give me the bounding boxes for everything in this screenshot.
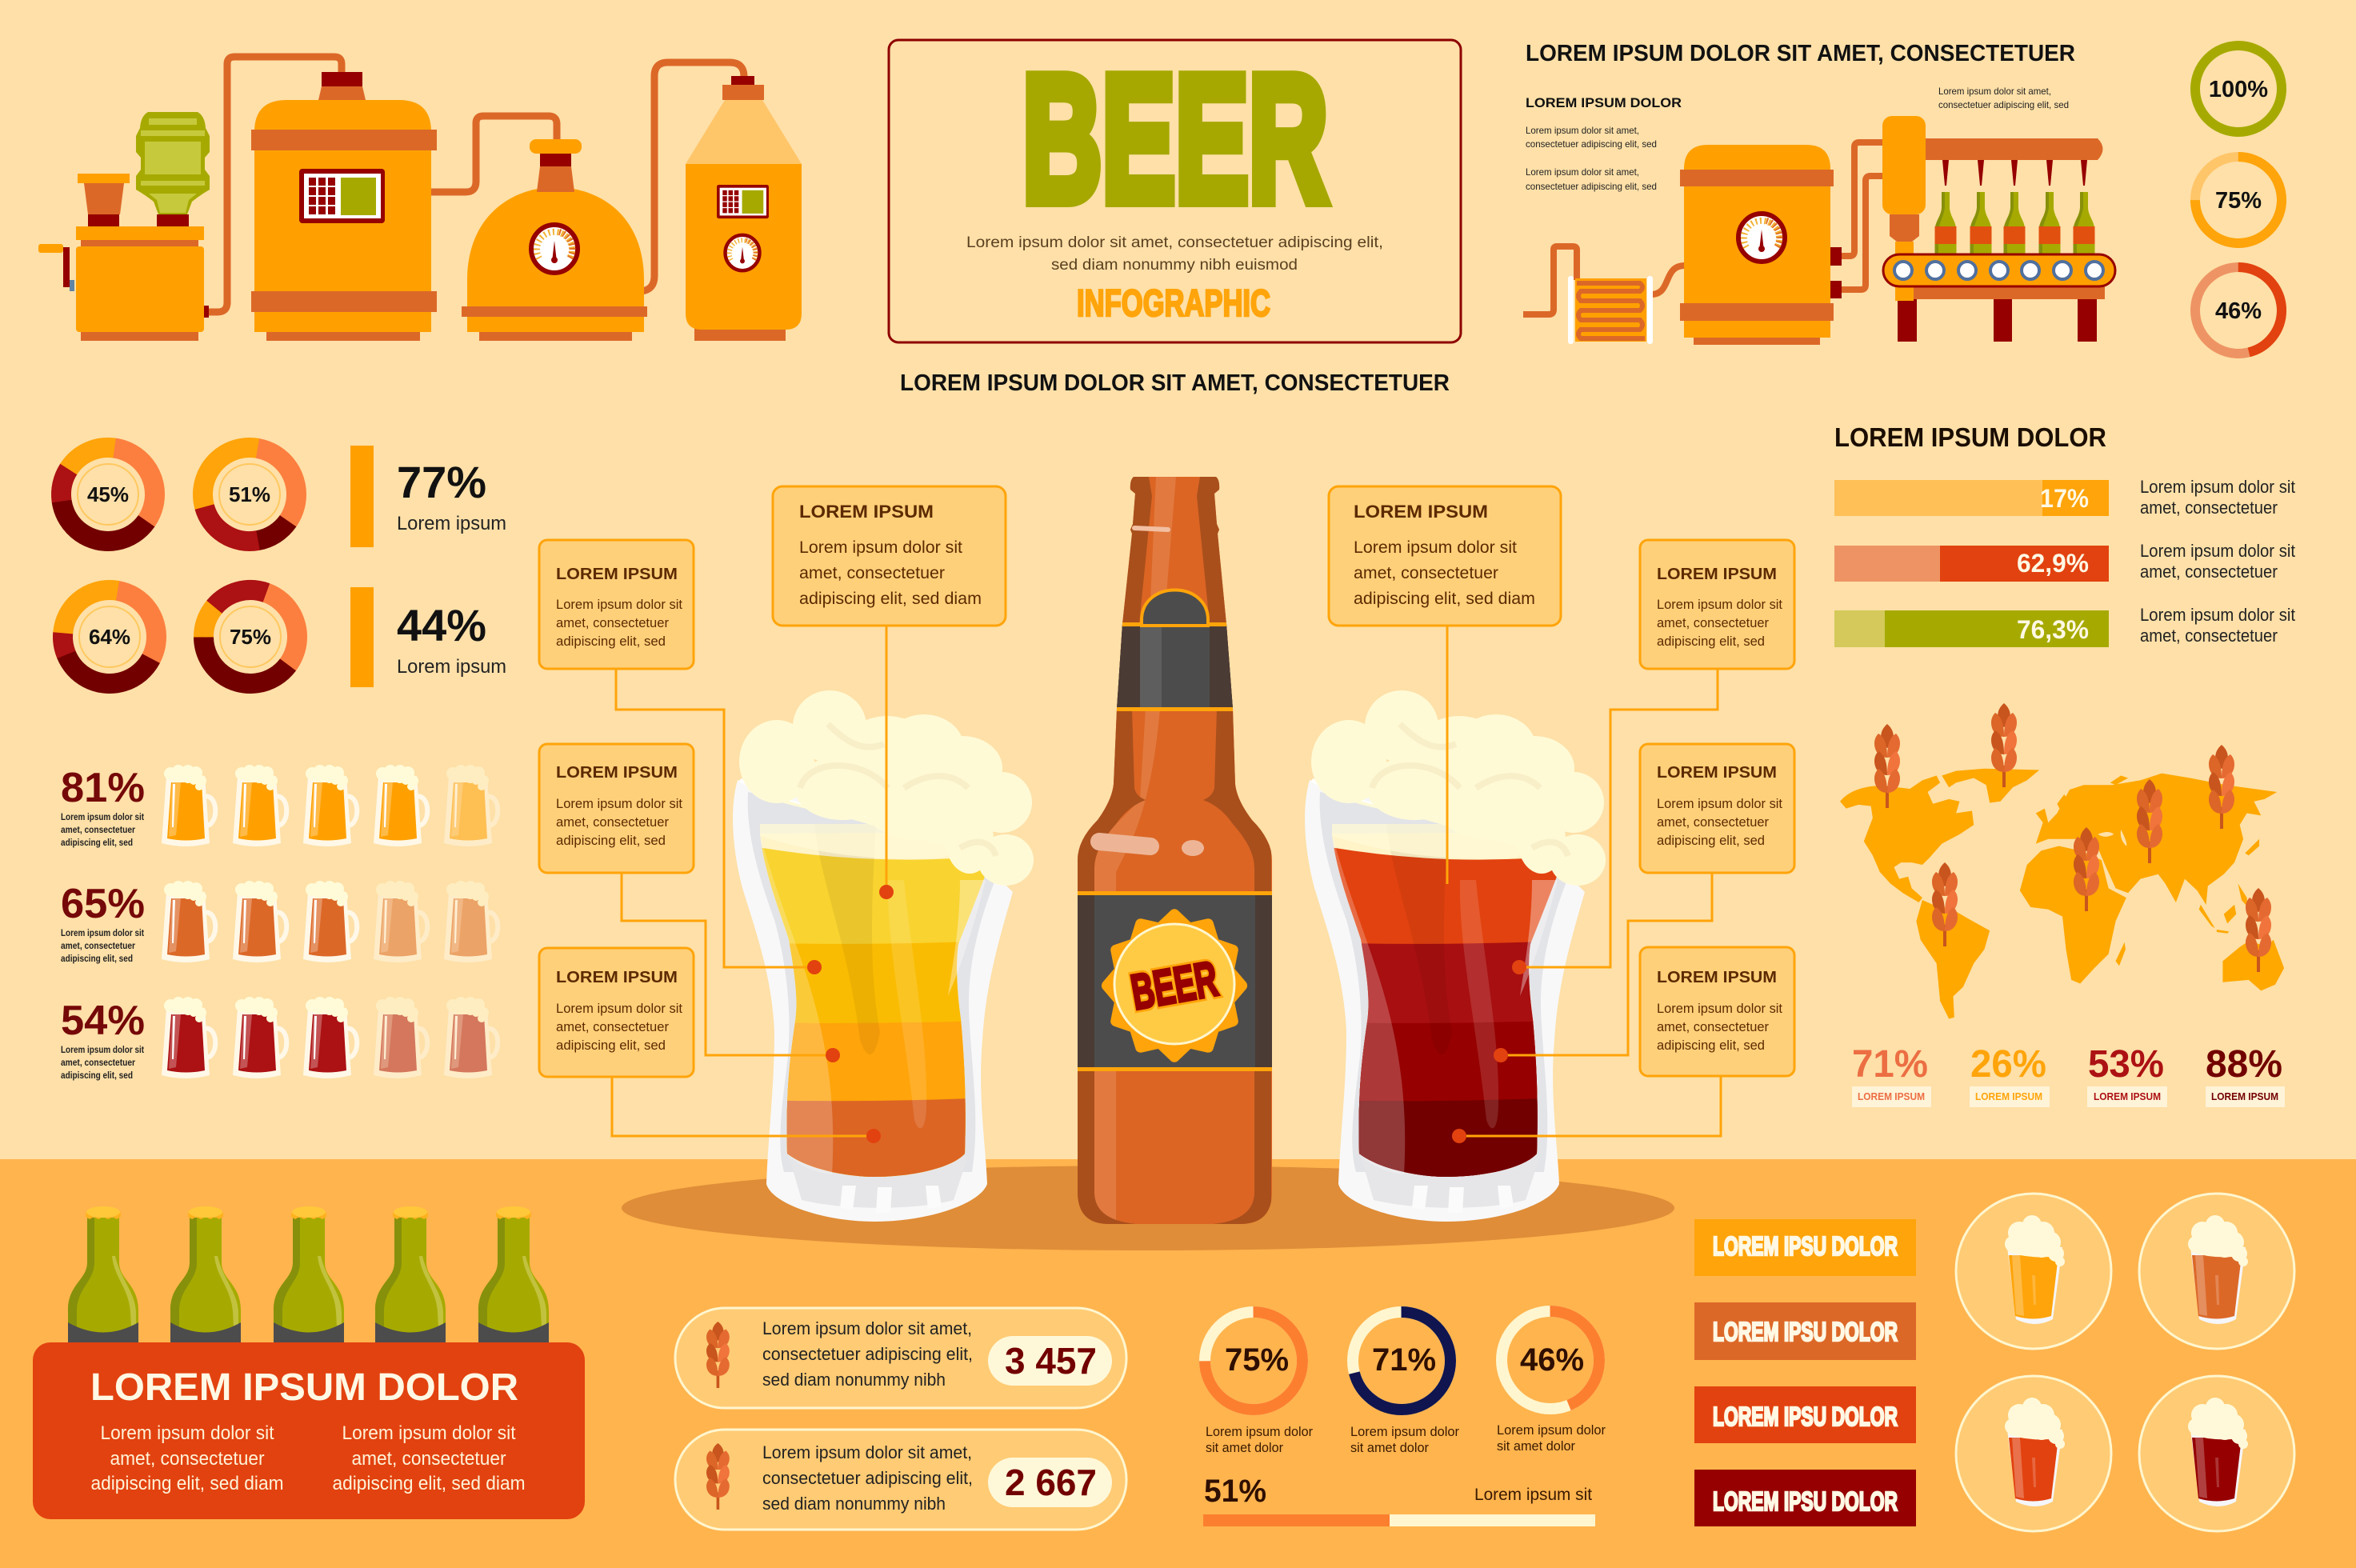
stat 77% <box>350 446 506 547</box>
title description: Lorem ipsum dolor sit amet, consectetuer adipiscing elit, <box>966 234 1383 251</box>
bottom ring 71%: Lorem ipsum dolor <box>1350 1424 1459 1439</box>
bottle badge: BEER <box>1127 951 1222 1021</box>
ring 75%: 75% <box>2215 188 2262 214</box>
donut 45%: 45% <box>87 482 129 506</box>
bottles on conveyor <box>1934 192 2094 254</box>
donut 51%: 51% <box>229 482 270 506</box>
top right sub-heading: LOREM IPSUM DOLOR <box>1526 95 1682 110</box>
bottom ring 71% <box>1350 1312 1459 1455</box>
mug row 54%: Lorem ipsum dolor sit <box>61 1046 144 1055</box>
map stat 26% <box>1970 1043 2050 1107</box>
stat 77%: Lorem ipsum <box>397 513 506 534</box>
callout top right: Lorem ipsum dolor sit <box>1354 538 1517 557</box>
bar 17%: Lorem ipsum dolor sit <box>2140 477 2295 497</box>
callout right 3: adipiscing elit, sed <box>1657 1038 1765 1053</box>
bar 17%: amet, consectetuer <box>2140 498 2278 518</box>
callout left 1: adipiscing elit, sed <box>556 634 666 649</box>
stat pill 2 667: consectetuer adipiscing elit, <box>762 1468 973 1488</box>
bar 17% <box>1834 477 2295 518</box>
tall tank <box>686 76 802 341</box>
map stat 88%: LOREM IPSUM <box>2211 1091 2278 1102</box>
callout top right <box>1329 486 1561 626</box>
bottom ring 46%: Lorem ipsum dolor <box>1497 1422 1606 1438</box>
map stat 71% <box>1852 1043 1931 1107</box>
callout left 1: LOREM IPSUM <box>556 566 678 583</box>
map stat 71%: LOREM IPSUM <box>1858 1091 1925 1102</box>
callout left 1 <box>539 540 694 669</box>
pipes <box>1523 142 1885 314</box>
hopper machine <box>38 112 210 341</box>
mug row 65%: amet, consectetuer <box>61 942 135 951</box>
donut charts <box>43 430 316 702</box>
callout left 2: Lorem ipsum dolor sit <box>556 797 682 811</box>
stat pill 3 457 <box>675 1308 1126 1408</box>
donut 51% <box>185 430 314 559</box>
top right small notes: Lorem ipsum dolor sit amet, <box>1526 166 1639 178</box>
pipes <box>206 57 744 312</box>
circle icon copper beer <box>2139 1194 2294 1349</box>
red crate panel: adipiscing elit, sed diam <box>91 1473 283 1494</box>
progress bar 51%: 51% <box>1204 1474 1266 1509</box>
legend label copper: LOREM IPSU DOLOR <box>1713 1317 1898 1346</box>
bottom ring 75%: 75% <box>1225 1342 1289 1378</box>
callout left 3: LOREM IPSUM <box>556 969 678 986</box>
callout top left <box>773 486 1006 626</box>
donut 75% <box>185 571 316 702</box>
stat pill 3 457: 3 457 <box>1005 1340 1097 1382</box>
callout top right: adipiscing elit, sed diam <box>1354 590 1535 608</box>
right beer glass <box>1292 690 1606 1222</box>
brewery equipment illustration <box>38 57 802 341</box>
bar 17%: 17% <box>2040 484 2089 513</box>
bottom ring 71%: 71% <box>1372 1342 1436 1378</box>
callout right 3 <box>1640 947 1794 1076</box>
bottom ring 46%: 46% <box>1520 1342 1584 1378</box>
donut 64% <box>46 574 173 700</box>
callout right 3: amet, consectetuer <box>1657 1020 1769 1034</box>
callout right 1: amet, consectetuer <box>1657 616 1769 630</box>
red crate panel: Lorem ipsum dolor sit <box>342 1422 516 1444</box>
top right small notes: Lorem ipsum dolor sit amet, <box>1526 125 1639 136</box>
callout right 1: Lorem ipsum dolor sit <box>1657 598 1782 612</box>
top right small notes: consectetuer adipiscing elit, sed <box>1526 181 1657 192</box>
legend label amber <box>1694 1219 1916 1276</box>
callout left 3: adipiscing elit, sed <box>556 1038 666 1053</box>
table shadow <box>622 1166 1674 1250</box>
ring 46%: 46% <box>2215 298 2262 324</box>
title description <box>966 234 1383 274</box>
bottle badge <box>1106 914 1242 1057</box>
connector dots right glass <box>1452 960 1526 1143</box>
bar 62,9%: Lorem ipsum dolor sit <box>2140 541 2295 561</box>
mug row 54%: adipiscing elit, sed <box>61 1071 133 1081</box>
top right small notes: consectetuer adipiscing elit, sed <box>1526 138 1657 150</box>
callout right 1 <box>1640 540 1794 669</box>
map stat 53% <box>2087 1043 2167 1107</box>
callout left 2: LOREM IPSUM <box>556 764 678 782</box>
stat pill 2 667: Lorem ipsum dolor sit amet, <box>762 1442 972 1462</box>
callout right 1: adipiscing elit, sed <box>1657 634 1765 649</box>
title description: sed diam nonummy nibh euismod <box>1051 257 1298 274</box>
callout right 1: LOREM IPSUM <box>1657 566 1777 583</box>
top right small notes <box>1526 86 2069 192</box>
stat 44% <box>350 587 506 687</box>
bottom ring 75% <box>1205 1312 1313 1455</box>
mug row 81%: amet, consectetuer <box>61 826 135 835</box>
ring 100% <box>2195 46 2282 132</box>
callout left 2: amet, consectetuer <box>556 815 670 830</box>
callout top left: LOREM IPSUM <box>799 502 934 522</box>
callout left 2: adipiscing elit, sed <box>556 834 666 848</box>
legend label red orange <box>1694 1386 1916 1443</box>
stat pill 2 667: 2 667 <box>1005 1462 1097 1503</box>
map stat 71%: 71% <box>1852 1043 1928 1086</box>
bottom ring 75%: Lorem ipsum dolor <box>1206 1424 1313 1439</box>
callout right 3: LOREM IPSUM <box>1657 969 1777 986</box>
central heading: LOREM IPSUM DOLOR SIT AMET, CONSECTETUER <box>900 370 1450 396</box>
cooling coil <box>1568 276 1653 344</box>
bottling line illustration <box>1523 116 2115 345</box>
mug row 54%: 54% <box>61 998 145 1044</box>
callout left 1: amet, consectetuer <box>556 616 670 630</box>
bottom ring 46%: sit amet dolor <box>1497 1438 1575 1454</box>
mug row 81%: Lorem ipsum dolor sit <box>61 813 144 822</box>
legend label copper <box>1694 1302 1916 1360</box>
callout left 3: Lorem ipsum dolor sit <box>556 1002 682 1016</box>
left beer glass <box>720 690 1034 1222</box>
filler head and rail <box>1882 116 2102 301</box>
kettle <box>462 139 647 341</box>
bar 76,3%: 76,3% <box>2017 615 2089 644</box>
green bottles row <box>68 1206 549 1342</box>
legend label amber: LOREM IPSU DOLOR <box>1713 1231 1898 1261</box>
stat 77%: 77% <box>397 457 486 507</box>
donut 64%: 64% <box>89 625 130 649</box>
callout top right: LOREM IPSUM <box>1354 502 1488 522</box>
floor <box>0 1159 2356 1568</box>
map stat 88%: 88% <box>2206 1043 2282 1086</box>
ring 46% <box>2195 267 2282 354</box>
map stat 53%: LOREM IPSUM <box>2094 1091 2161 1102</box>
subtitle INFOGRAPHIC: INFOGRAPHIC <box>1077 282 1270 324</box>
red crate panel: amet, consectetuer <box>352 1448 506 1470</box>
callout right 2: LOREM IPSUM <box>1657 764 1777 782</box>
mug row 65%: adipiscing elit, sed <box>61 954 133 964</box>
mug row 81%: 81% <box>61 765 145 811</box>
title BEER: BEER <box>1022 38 1328 239</box>
mug row 65%: 65% <box>61 881 145 927</box>
red crate panel: LOREM IPSUM DOLOR <box>90 1366 518 1409</box>
bar 62,9%: amet, consectetuer <box>2140 562 2278 582</box>
callout top left: Lorem ipsum dolor sit <box>799 538 962 557</box>
stat pill 3 457: Lorem ipsum dolor sit amet, <box>762 1318 972 1338</box>
map stat 26%: 26% <box>1970 1043 2046 1086</box>
mug row 65%: Lorem ipsum dolor sit <box>61 929 144 938</box>
red crate panel: amet, consectetuer <box>110 1448 265 1470</box>
top right small notes: Lorem ipsum dolor sit amet, <box>1938 86 2051 97</box>
progress bar 51% <box>1203 1474 1595 1526</box>
circle icon dark beer <box>2139 1376 2294 1531</box>
map stat 26%: LOREM IPSUM <box>1975 1091 2042 1102</box>
ring 75% <box>2195 157 2282 243</box>
mug row 65% <box>61 881 498 964</box>
bar 76,3%: amet, consectetuer <box>2140 626 2278 646</box>
callout right 3: Lorem ipsum dolor sit <box>1657 1002 1782 1016</box>
progress bar 51%: Lorem ipsum sit <box>1474 1486 1592 1504</box>
tank with gauge <box>1680 145 1842 345</box>
callout left 2 <box>539 744 694 873</box>
red crate panel: Lorem ipsum dolor sit <box>101 1422 274 1444</box>
callout left 3: amet, consectetuer <box>556 1020 670 1034</box>
red crate panel: adipiscing elit, sed diam <box>333 1473 525 1494</box>
bars heading: LOREM IPSUM DOLOR <box>1834 422 2106 452</box>
callout left 3 <box>539 948 694 1077</box>
callout right 2: Lorem ipsum dolor sit <box>1657 797 1782 811</box>
conveyor <box>1883 254 2115 342</box>
connector lines left glass <box>612 626 886 1136</box>
title box <box>889 38 1461 342</box>
connector dots left glass <box>807 885 894 1143</box>
callout right 2: amet, consectetuer <box>1657 815 1769 830</box>
bottom ring 46% <box>1497 1311 1606 1454</box>
donut 45% <box>43 430 173 559</box>
mug row 81% <box>61 765 498 848</box>
legend label red orange: LOREM IPSU DOLOR <box>1713 1402 1898 1431</box>
world map <box>1840 769 2284 1019</box>
callout right 2: adipiscing elit, sed <box>1657 834 1765 848</box>
donut 75%: 75% <box>230 625 271 649</box>
stat pill 2 667: sed diam nonummy nibh <box>762 1494 946 1514</box>
circle icon red beer <box>1956 1376 2111 1531</box>
top right heading: LOREM IPSUM DOLOR SIT AMET, CONSECTETUER <box>1526 41 2075 66</box>
stat pill 3 457: sed diam nonummy nibh <box>762 1370 946 1390</box>
red crate panel <box>33 1342 585 1519</box>
bar 62,9% <box>1834 541 2295 582</box>
mug row 54% <box>61 997 498 1081</box>
bar 76,3%: Lorem ipsum dolor sit <box>2140 605 2295 625</box>
ring 100%: 100% <box>2209 77 2268 102</box>
callout top left: amet, consectetuer <box>799 564 945 582</box>
connector lines right glass <box>1447 626 1721 1136</box>
callout top right: amet, consectetuer <box>1354 564 1498 582</box>
callout right 2 <box>1640 744 1794 873</box>
beer bottle <box>1072 472 1280 1228</box>
callout top left: adipiscing elit, sed diam <box>799 590 982 608</box>
map stat 53%: 53% <box>2088 1043 2164 1086</box>
legend label dark red <box>1694 1470 1916 1526</box>
bar 76,3% <box>1834 605 2295 647</box>
progress rings top right <box>2195 46 2282 354</box>
bottle badge: BEER <box>1127 951 1222 1021</box>
stat pill 3 457: consectetuer adipiscing elit, <box>762 1344 973 1364</box>
bottom ring 71%: sit amet dolor <box>1350 1440 1429 1455</box>
stat 44%: 44% <box>397 600 486 650</box>
callout left 1: Lorem ipsum dolor sit <box>556 598 682 612</box>
large tank <box>251 72 437 341</box>
mug row 54%: amet, consectetuer <box>61 1058 135 1068</box>
wheat map markers <box>1874 703 2271 972</box>
mug row 81%: adipiscing elit, sed <box>61 838 133 848</box>
legend label dark red: LOREM IPSU DOLOR <box>1713 1486 1898 1516</box>
stat 44%: Lorem ipsum <box>397 656 506 678</box>
top right small notes: consectetuer adipiscing elit, sed <box>1938 99 2069 110</box>
stat pill 2 667 <box>675 1430 1126 1530</box>
bottom ring 75%: sit amet dolor <box>1206 1440 1283 1455</box>
bar 62,9%: 62,9% <box>2017 549 2089 578</box>
map stat 88% <box>2206 1043 2285 1107</box>
circle icon amber beer <box>1956 1194 2111 1349</box>
